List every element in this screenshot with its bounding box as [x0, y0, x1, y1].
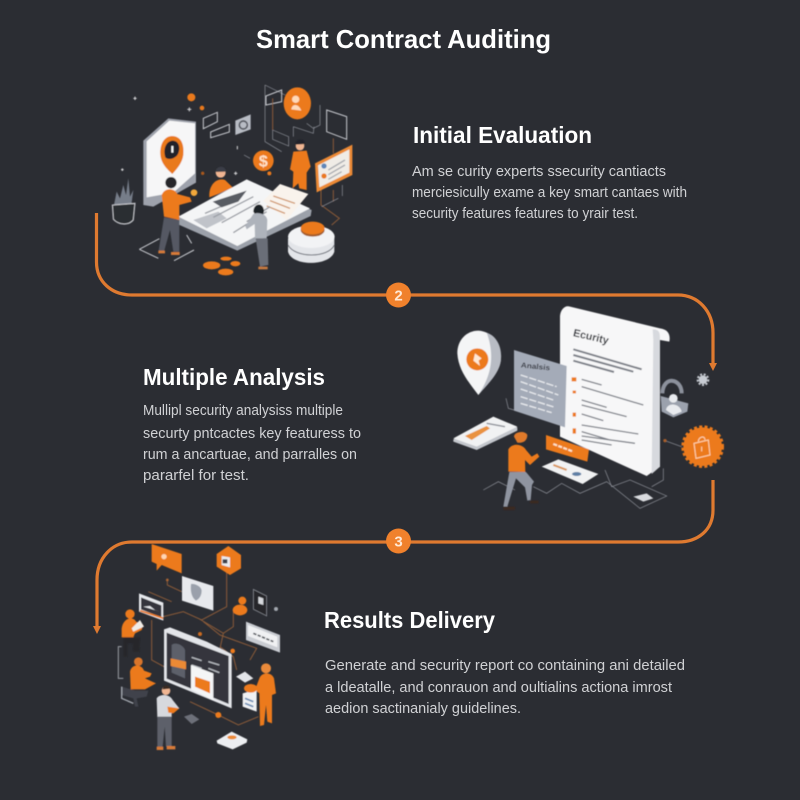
- person: seated analyst: [122, 657, 156, 707]
- text block: results delivery: aedion sactinanialy guidelines.: [325, 701, 521, 717]
- icon: shield panel: [143, 118, 196, 207]
- small screen card: [139, 593, 163, 621]
- heading: results delivery: Results Delivery: [324, 607, 495, 633]
- icon: lock: [661, 381, 688, 417]
- text block: initial evaluation: security features features to yrair test.: [412, 206, 638, 222]
- text block: multiple analysis: rum a ancartuae, and parralles on: [143, 447, 357, 463]
- text block: initial evaluation: [412, 164, 687, 222]
- person: top-left analyst: [122, 609, 144, 657]
- person: orange standing figure: [236, 663, 276, 726]
- floating wireframes and connectors: [121, 85, 347, 225]
- floor tiles: [184, 714, 247, 749]
- text block: results delivery: Generate and security report co containing ani detailed: [325, 658, 685, 674]
- report card: [246, 622, 280, 653]
- text block: multiple analysis: [143, 403, 361, 484]
- text block: multiple analysis: pararfel for test.: [143, 468, 249, 484]
- document on desk: [177, 179, 312, 251]
- scroll document: [560, 306, 670, 476]
- document heading: Ecurity: [572, 327, 610, 347]
- step badge 2: [386, 282, 411, 308]
- analysis panel: Analsis: [520, 360, 551, 372]
- orange tag: [546, 435, 589, 462]
- text block: multiple analysis: Mullipl security analysiss multiple: [143, 403, 343, 419]
- icon: phone and user: [233, 589, 278, 616]
- person: reviewer walking: [503, 432, 539, 510]
- icon: server cylinder: [288, 222, 335, 263]
- text block: results delivery: [325, 658, 685, 717]
- person: orange suit: [290, 139, 311, 190]
- connector: step 2 to step 3 arrow: [93, 480, 713, 634]
- central monitor: [164, 627, 232, 708]
- icon: orange gear seal: [683, 427, 723, 467]
- person: seated reviewer: [209, 167, 233, 197]
- text block: multiple analysis: securty pntcactes key featuress to: [143, 426, 361, 442]
- tablet card: [542, 459, 598, 484]
- floor grid and coins: [139, 235, 240, 275]
- icon: plant: [112, 178, 135, 224]
- icon: user badge: [284, 87, 311, 119]
- text block: initial evaluation: Am se curity experts ssecurity cantiacts: [412, 164, 666, 180]
- circuit lines: [483, 398, 682, 508]
- document lines: [573, 349, 643, 445]
- step badge 3: 3: [394, 534, 403, 550]
- icon: dollar coin: $: [259, 154, 268, 171]
- icon: hexagon badge: [217, 546, 241, 575]
- person: left analyst: [158, 177, 197, 255]
- network connectors: [118, 558, 258, 725]
- text block: initial evaluation: merciesicully exame a key smart cantaes with: [412, 185, 687, 201]
- illustration: initial evaluation: [112, 85, 352, 275]
- step badge 3: [386, 528, 411, 554]
- heading: multiple analysis: Multiple Analysis: [143, 364, 325, 390]
- illustration: multiple analysis: [453, 306, 723, 510]
- icon: speech bubble: [152, 544, 182, 573]
- shield card: [182, 576, 213, 611]
- title: Smart Contract Auditing: [256, 24, 551, 54]
- heading: initial evaluation: Initial Evaluation: [413, 122, 592, 148]
- analysis panel: [514, 350, 567, 427]
- step badge 2: 2: [394, 288, 403, 304]
- text block: results delivery: a ldeatalle, and conrauon and oultialins actiona imrost: [325, 680, 672, 696]
- person: gray figure: [245, 205, 268, 269]
- icon: dollar coin: [253, 150, 274, 171]
- icon: orange report board: [315, 145, 352, 192]
- illustration: results delivery: [118, 544, 280, 750]
- person: presenter: [157, 686, 179, 750]
- phone: [453, 417, 517, 450]
- icon: small gear: [698, 374, 708, 385]
- icon: location pin: [457, 331, 501, 395]
- connector: step 1 to step 2 arrow: [96, 213, 717, 371]
